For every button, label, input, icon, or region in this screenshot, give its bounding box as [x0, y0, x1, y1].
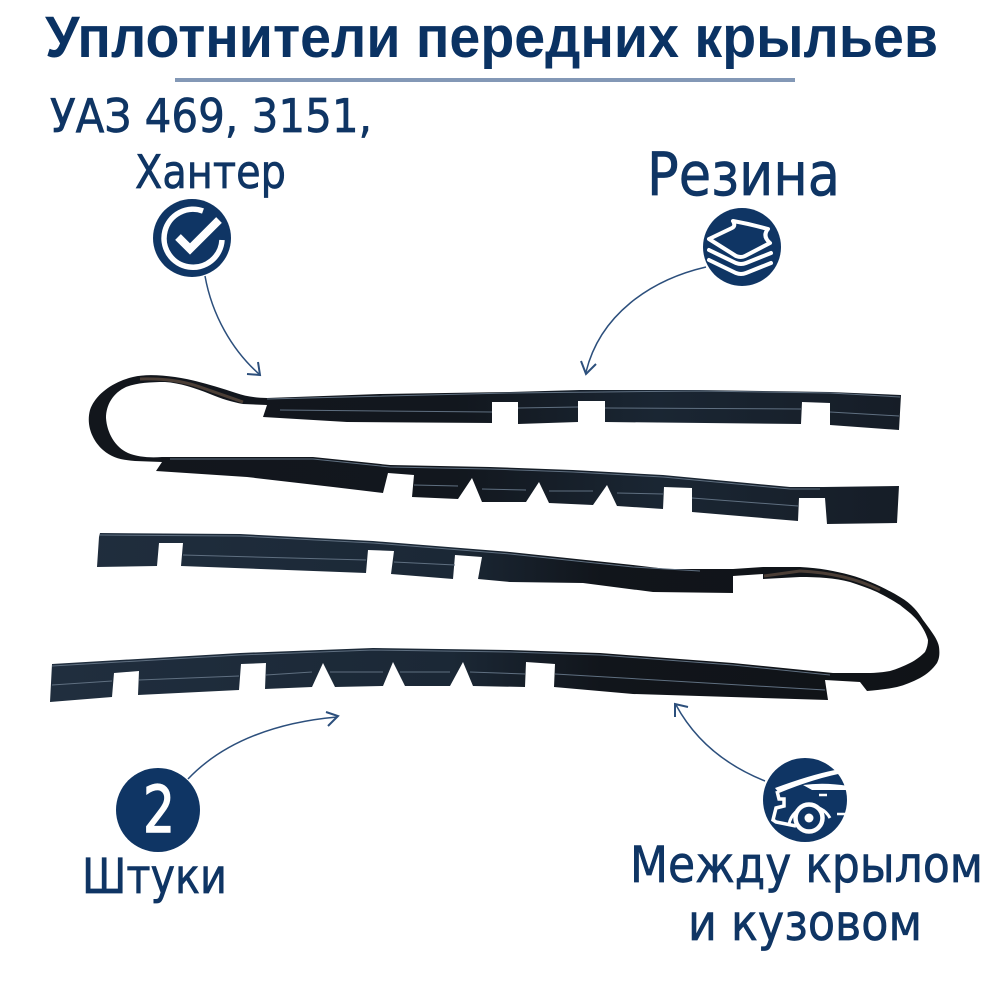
photo: rubber seal strip, lower pair: [50, 533, 939, 702]
label: placement: и кузовом: [688, 894, 922, 952]
icon: car front wing badge: [763, 758, 848, 842]
label: vehicle models: Хантер: [135, 145, 286, 199]
label: vehicle models: [50, 89, 372, 199]
label: placement: [630, 836, 983, 952]
title underline: [175, 78, 795, 82]
title: Уплотнители передних крыльев: [45, 5, 938, 70]
label: vehicle models: УАЗ 469, 3151,: [50, 89, 372, 143]
label: material: Резина: [647, 140, 840, 210]
label: quantity: Штуки: [82, 849, 227, 905]
arrow: material to strip: [581, 267, 706, 374]
icon: number two badge: 2: [143, 774, 175, 848]
icon: check mark badge: [153, 199, 231, 277]
arrow: models to strip: [205, 276, 260, 375]
icon: number two badge: [116, 768, 200, 852]
photo: rubber seal strip, upper pair: [89, 375, 901, 524]
icon: stacked material sheets: [703, 208, 781, 286]
arrow: placement to strip: [675, 704, 765, 781]
arrow: quantity to strip: [188, 712, 338, 779]
